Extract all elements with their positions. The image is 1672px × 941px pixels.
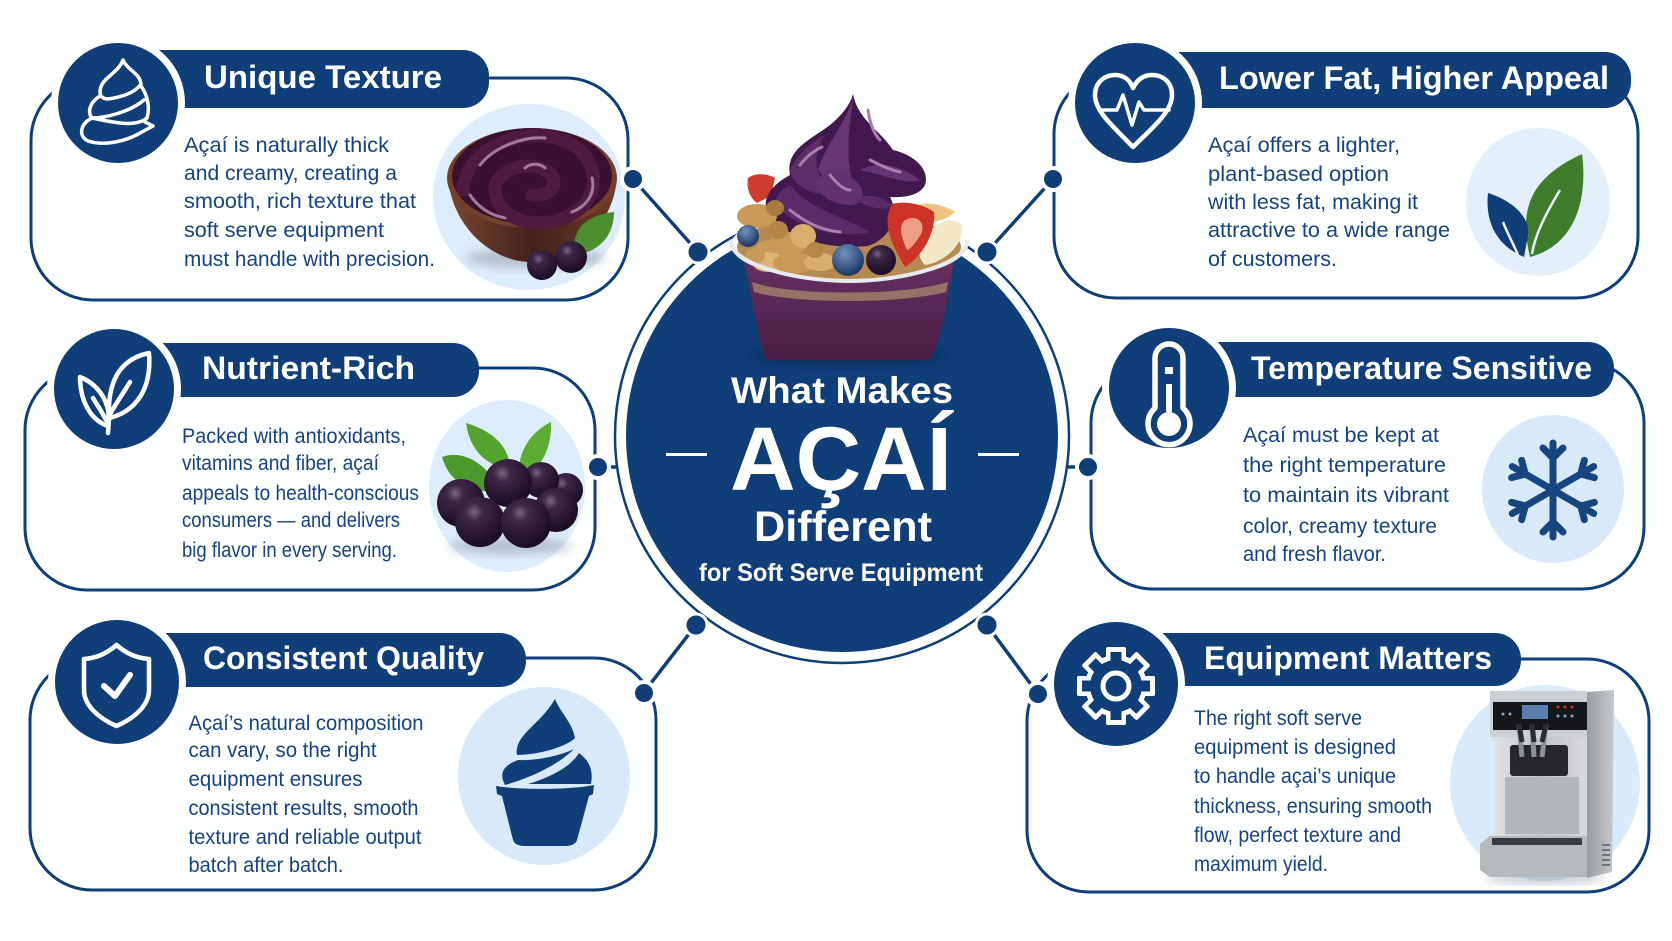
left strawberry xyxy=(747,174,775,203)
body text: The right soft serve xyxy=(1194,707,1362,730)
glass mouth filled with toppings xyxy=(731,209,967,281)
title bar: Consistent Quality xyxy=(203,640,484,676)
body text: and fresh flavor. xyxy=(1243,543,1386,566)
blueberries xyxy=(737,225,759,247)
body text: texture and reliable output xyxy=(188,826,422,849)
title bar: Unique Texture xyxy=(204,59,442,95)
title bar xyxy=(1120,52,1631,108)
body text: smooth, rich texture that xyxy=(184,190,416,213)
panel: temperature sensitive xyxy=(1091,321,1644,589)
body text: the right temperature xyxy=(1243,454,1446,477)
body text: equipment ensures xyxy=(188,768,362,791)
panel: consistent quality xyxy=(30,613,656,890)
body text xyxy=(182,425,419,562)
body text: batch after batch. xyxy=(188,854,344,877)
icon: shield check xyxy=(48,613,186,751)
ring connector dots xyxy=(685,241,998,636)
central title: Different xyxy=(754,503,932,551)
panel: equipment matters xyxy=(1027,615,1649,892)
card frame xyxy=(1027,659,1649,892)
cup body xyxy=(741,245,957,360)
swirl xyxy=(766,94,926,247)
title bar: Nutrient-Rich xyxy=(202,350,415,386)
body text: Açaí’s natural composition xyxy=(188,712,424,735)
icon: gear xyxy=(1047,615,1185,753)
panel: lower fat, higher appeal xyxy=(1054,36,1638,298)
icon: heart pulse xyxy=(1068,36,1202,170)
body text: to handle açai’s unique xyxy=(1194,765,1396,788)
body text: big flavor in every serving. xyxy=(182,539,397,562)
icon: soft serve swirl xyxy=(51,36,185,170)
title bar xyxy=(130,343,479,397)
image: soft serve cup xyxy=(458,687,630,865)
central title: for Soft Serve Equipment xyxy=(699,559,984,587)
body text: vitamins and fiber, açaí xyxy=(182,452,379,475)
body text: flow, perfect texture and xyxy=(1194,824,1401,847)
body text: can vary, so the right xyxy=(188,739,377,762)
image: snowflake xyxy=(1482,415,1624,563)
rim xyxy=(731,240,967,281)
title bar xyxy=(130,633,526,687)
title bar: Lower Fat, Higher Appeal xyxy=(1219,60,1609,96)
image: plant leaves xyxy=(1466,128,1610,276)
title bar: Temperature Sensitive xyxy=(1251,350,1592,386)
body text: maximum yield. xyxy=(1194,853,1328,876)
body text: with less fat, making it xyxy=(1207,191,1418,214)
icon: leaves xyxy=(47,322,181,456)
body text xyxy=(184,134,435,271)
title bar xyxy=(1130,633,1521,686)
connector lines xyxy=(598,179,1087,694)
central title xyxy=(666,370,1019,587)
body text: soft serve equipment xyxy=(184,219,384,242)
body text: plant-based option xyxy=(1208,163,1389,186)
body text: color, creamy texture xyxy=(1243,515,1437,538)
body text: consistent results, smooth xyxy=(188,797,418,820)
card frame xyxy=(1091,361,1644,589)
image: açaí cup xyxy=(731,94,967,365)
body text xyxy=(1243,424,1449,566)
image: soft serve machine xyxy=(1450,685,1640,883)
body text: must handle with precision. xyxy=(184,248,435,271)
body text: to maintain its vibrant xyxy=(1243,484,1449,507)
body text: Açaí is naturally thick xyxy=(184,134,390,157)
body text: Açaí offers a lighter, xyxy=(1208,134,1400,157)
card frame xyxy=(25,368,595,590)
banana xyxy=(912,204,955,222)
body text: appeals to health-conscious xyxy=(182,482,419,505)
body text: Açaí must be kept at xyxy=(1243,424,1439,447)
central title: What Makes xyxy=(731,370,953,411)
body text: of customers. xyxy=(1208,248,1337,271)
title bar xyxy=(130,50,489,108)
card frame xyxy=(1054,72,1638,298)
body text xyxy=(188,712,424,877)
image: açaí berries xyxy=(429,400,585,572)
body text: equipment is designed xyxy=(1194,736,1396,759)
icon: thermometer xyxy=(1102,321,1236,455)
body text xyxy=(1207,134,1450,271)
title bar xyxy=(1170,342,1614,397)
card frame xyxy=(31,78,628,300)
body text xyxy=(1194,707,1432,876)
card frame xyxy=(30,658,656,890)
body text: and creamy, creating a xyxy=(184,162,397,185)
body text: attractive to a wide range xyxy=(1208,219,1450,242)
central title: AÇAÍ xyxy=(730,409,954,510)
body text: Packed with antioxidants, xyxy=(182,425,406,448)
panel: unique texture xyxy=(31,36,628,300)
granola xyxy=(737,200,836,273)
right strawberry xyxy=(888,203,934,267)
panel: nutrient-rich xyxy=(25,322,595,590)
body text: thickness, ensuring smooth xyxy=(1194,795,1432,818)
body text: consumers — and delivers xyxy=(182,509,400,532)
image: açaí bowl xyxy=(433,104,625,290)
connector dots xyxy=(587,168,1099,705)
central disc xyxy=(615,209,1069,663)
title bar: Equipment Matters xyxy=(1204,640,1492,676)
